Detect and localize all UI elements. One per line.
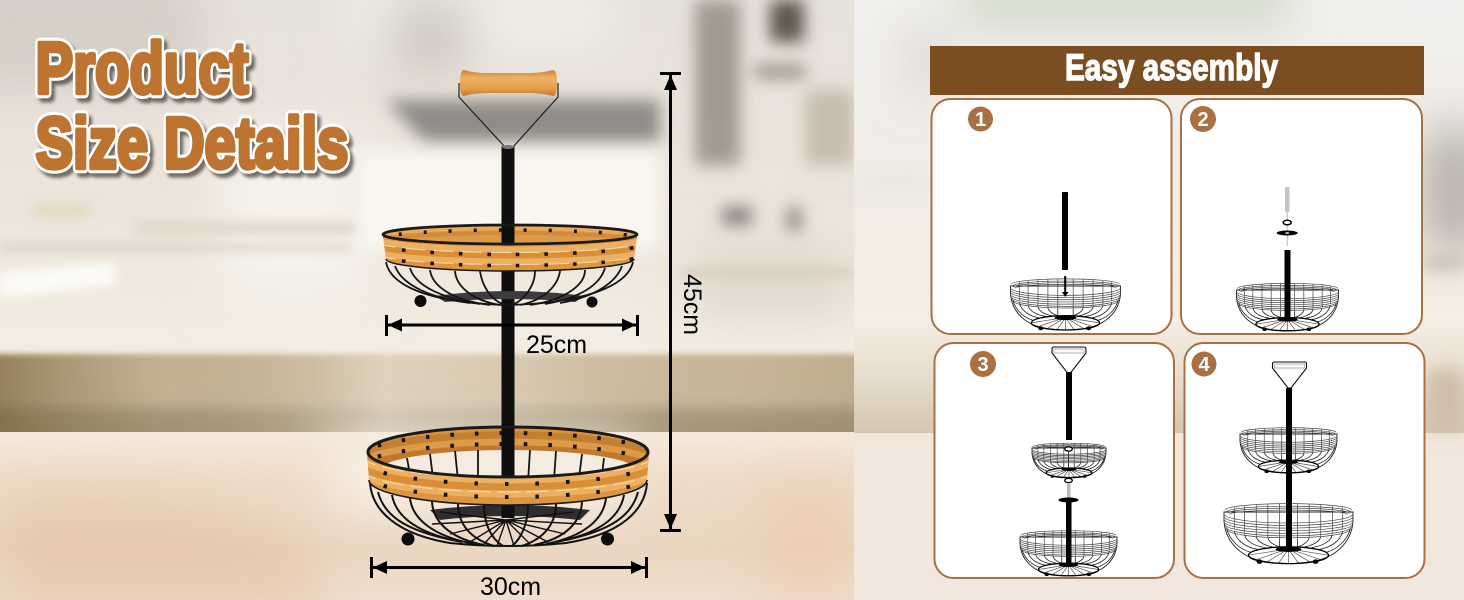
lower basket feet: [402, 532, 414, 546]
panel: step 3: [934, 343, 1174, 578]
handle and pole: [1272, 362, 1306, 548]
panel: step 4: [1184, 343, 1424, 578]
dimension: 30cm lower basket width: [370, 557, 648, 600]
handle wire: [459, 83, 558, 147]
step number 4: [1192, 352, 1216, 376]
upper basket bowl wires: [386, 262, 633, 305]
pole, washer and screw: [1277, 187, 1298, 320]
lower basket back weave: [370, 428, 646, 464]
panel: step 1: [932, 99, 1172, 334]
heading bar: Easy assembly: [930, 46, 1424, 95]
large wire basket: [1020, 531, 1117, 576]
upper wire basket: [1240, 428, 1337, 473]
dimension: 25cm upper basket width: [385, 315, 639, 359]
background: left kitchen photo: [0, 0, 864, 600]
lower basket front weave: [358, 427, 658, 508]
pole top cap: [502, 145, 514, 149]
step number 2: [1190, 106, 1216, 132]
title: Product Size Details: Product: [36, 29, 249, 109]
step number 1: [968, 106, 993, 132]
wire basket: [1010, 279, 1120, 331]
wooden handle: [460, 70, 557, 96]
handle and pole: [1052, 347, 1086, 440]
heading bar: Easy assembly: Easy assembly: [1065, 47, 1278, 88]
background: right kitchen photo: [854, 0, 1464, 600]
dimension: 45cm height: [660, 72, 706, 532]
pole and down arrow: [1062, 192, 1068, 297]
step number 4: 4: [1198, 354, 1210, 376]
title: Product Size Details: Product: [39, 34, 252, 114]
step number 3: 3: [977, 354, 989, 376]
lower wire basket: [1224, 504, 1353, 564]
title: Product Size Details: Size Details: [36, 104, 348, 184]
dimension: 25cm upper basket width: 25cm: [526, 331, 587, 359]
panel: step 2: [1181, 99, 1422, 334]
lower basket inner opening: [380, 450, 636, 490]
lower pole: [1058, 498, 1078, 565]
center pole: [502, 146, 514, 518]
upper basket feet: [414, 295, 426, 307]
product photo: two-tier wicker basket: [358, 70, 658, 546]
step number 1: 1: [975, 109, 986, 131]
lower basket bowl wires: [370, 483, 647, 546]
small wire basket: [1032, 443, 1106, 478]
screw, washers and rings: [1065, 447, 1072, 498]
wire basket: [1236, 283, 1338, 331]
pole above the upper basket: [502, 146, 514, 246]
dimension: 45cm height: 45cm: [678, 274, 706, 335]
title: Product Size Details: [36, 29, 352, 188]
title: Product Size Details: Product: [36, 29, 249, 109]
step number 3: [970, 351, 996, 377]
title: Product Size Details: Size Details: [39, 108, 352, 188]
title: Product Size Details: Size Details: [36, 104, 348, 184]
step number 2: 2: [1197, 109, 1209, 131]
upper basket front weave: [375, 225, 645, 274]
upper basket back weave: [384, 226, 636, 243]
